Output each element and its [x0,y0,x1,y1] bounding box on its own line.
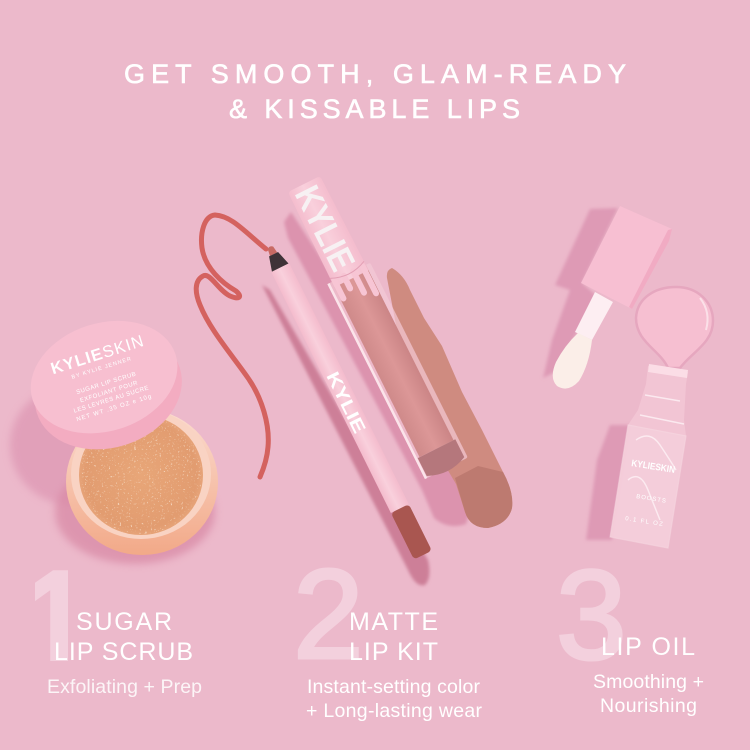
lip liner swatch scribble [196,215,268,477]
heading: lip oil: LIP OIL [601,633,695,661]
product: sugar lip scrub [10,303,218,564]
title: & KISSABLE LIPS [229,94,520,124]
description: Instant-setting color [307,676,480,698]
icon: lid: SUGAR LIP SCRUB [76,372,137,396]
heading: matte lip kit: LIP KIT [349,638,438,666]
icon: lid: LES LEVRES AU SUCRE [73,385,149,415]
icon: lid: NET WT .35 OZ e 10g [76,394,152,423]
product: lip oil bottle: BOOSTS [636,494,666,505]
product: oil droplet [636,287,713,368]
number 2: 2 [293,543,364,685]
product: lip kit shadow [284,212,474,526]
icon: lid: KYLIESKIN [49,332,146,378]
product: lip oil bottle: 0.1 FL OZ [625,516,663,528]
product: matte lip kit [283,173,469,482]
heading: matte lip kit [349,608,438,666]
title [124,59,626,124]
product: lip oil shadows [543,208,630,540]
product: lip liner pencil [260,242,432,585]
icon: pencil collar [265,250,289,273]
heading: sugar lip scrub [54,608,193,666]
icon: wand [575,292,613,340]
icon: lid: EXFOLIANT POUR [79,380,139,404]
icon: pencil tip [266,245,277,256]
description: Exfoliating + Prep [47,676,202,698]
title: GET SMOOTH, GLAM-READY [124,59,626,89]
description: Smoothing + [593,671,704,693]
icon: pencil end cap [391,504,432,560]
description [593,671,704,717]
product: lip oil bottle: KYLIESKIN [631,458,676,476]
product: lip oil applicator [553,206,672,389]
icon: cap [581,206,672,309]
heading: sugar lip scrub: SUGAR [76,608,172,636]
number 3: 3 [556,544,627,686]
number 1: 1 [15,540,98,708]
icon: lid: BY KYLIE JENNER [71,356,132,381]
step 3 [556,544,704,717]
icon: pencil barrel [271,263,409,513]
product: lip oil bottle [610,364,688,548]
product: lip liner pencil: KYLIE [322,368,370,436]
description: + Long-lasting wear [306,700,482,722]
icon: glass tube [327,263,469,482]
product: lip swatch [387,268,512,528]
icon: jar [66,409,218,555]
step 1 [35,570,202,697]
heading: sugar lip scrub: LIP SCRUB [54,638,193,666]
icon: lid [16,303,197,467]
heading: matte lip kit: MATTE [349,608,438,636]
description [306,676,482,722]
description: Nourishing [600,695,697,717]
step 2 [293,543,482,722]
icon: cap with drips: KYLIE [287,180,362,277]
icon: doe-foot tip [553,333,592,389]
